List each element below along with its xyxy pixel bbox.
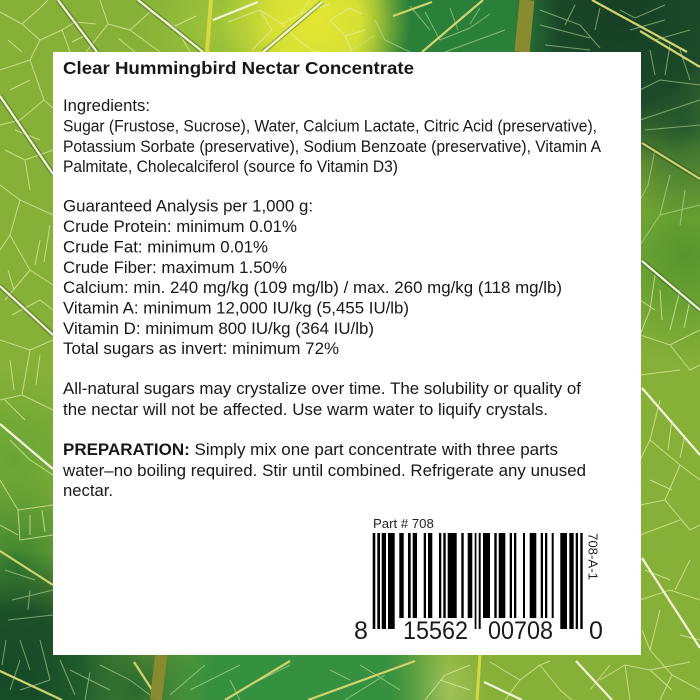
midribs	[156, 0, 527, 700]
title: Clear Hummingbird Nectar Concentrate	[63, 58, 414, 78]
guaranteed analysis: Crude Fat: minimum 0.01%	[63, 238, 268, 256]
guaranteed analysis: Calcium: min. 240 mg/kg (109 mg/lb) / max. 260 mg/kg (118 mg/lb)	[63, 278, 562, 297]
preparation	[62, 440, 586, 500]
barcode digits: 00708	[488, 617, 553, 645]
guaranteed analysis: Vitamin A: minimum 12,000 IU/kg (5,455 IU/lb)	[63, 298, 409, 318]
crystallization note: the nectar will not be affected. Use warm water to liquify crystals.	[63, 400, 548, 419]
guaranteed analysis: Crude Fiber: maximum 1.50%	[63, 258, 287, 277]
part number: Part # 708	[373, 516, 434, 531]
ingredients: Potassium Sorbate (preservative), Sodium Benzoate (preservative), Vitamin A	[63, 137, 602, 156]
barcode digits	[354, 617, 603, 645]
barcode digits: 8	[354, 617, 368, 645]
guaranteed analysis: Guaranteed Analysis per 1,000 g:	[63, 196, 313, 216]
ingredients: Palmitate, Cholecalciferol (source fo Vitamin D3)	[63, 157, 398, 176]
ingredients	[63, 96, 602, 176]
barcode	[373, 533, 583, 629]
guaranteed analysis: Crude Protein: minimum 0.01%	[63, 217, 297, 236]
guaranteed analysis	[63, 196, 562, 358]
barcode side code: 708-A-1	[586, 533, 600, 580]
ingredients: Sugar (Frustose, Sucrose), Water, Calcium Lactate, Citric Acid (preservative),	[63, 116, 597, 136]
guaranteed analysis: Vitamin D: minimum 800 IU/kg (364 IU/lb)	[63, 319, 374, 338]
ingredients: Ingredients:	[63, 96, 150, 115]
preparation: nectar.	[63, 481, 113, 500]
crystallization note	[63, 379, 581, 419]
main veins: dark shading	[0, 0, 700, 335]
preparation: PREPARATION: Simply mix one part concentrate with three parts	[63, 440, 558, 459]
guaranteed analysis: Total sugars as invert: minimum 72%	[63, 339, 339, 358]
barcode digits: 0	[589, 617, 603, 645]
crystallization note: All-natural sugars may crystalize over time. The solubility or quality of	[63, 379, 581, 398]
preparation: water–no boiling required. Stir until combined. Refrigerate any unused	[62, 461, 586, 480]
barcode digits: 15562	[403, 617, 468, 645]
